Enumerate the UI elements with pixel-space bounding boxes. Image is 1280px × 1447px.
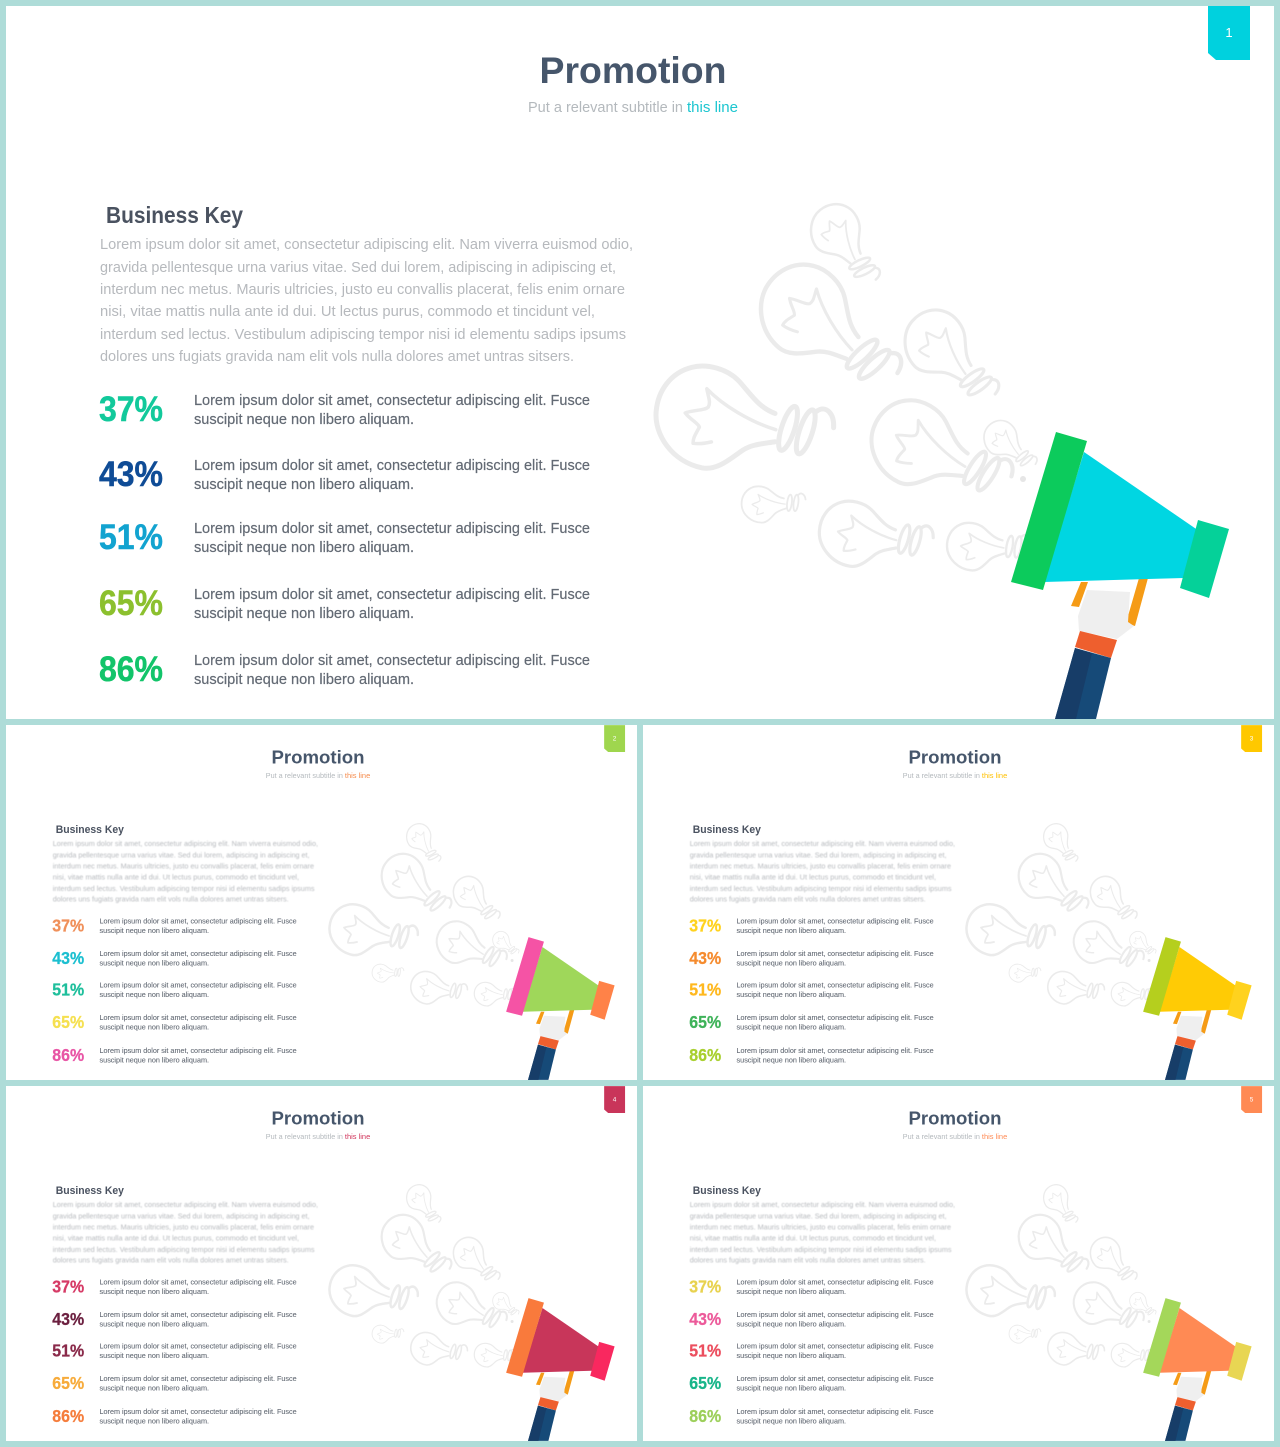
stat 43%: Lorem ipsum dolor sit amet, consectetur adipiscing elit. Fusce — [737, 1310, 934, 1319]
icon: light bulbs — [326, 1180, 523, 1369]
stat 37%: 37% — [689, 916, 722, 936]
stat 65%: suscipit neque non libero aliquam. — [737, 1384, 846, 1393]
stat 51%: 51% — [52, 979, 85, 999]
subtitle: Put a relevant subtitle in — [528, 99, 683, 116]
body paragraph: interdum nec metus. Mauris ultricies, justo eu convallis placerat, felis enim ornare — [53, 861, 314, 870]
stat 51%: Lorem ipsum dolor sit amet, consectetur adipiscing elit. Fusce — [100, 1341, 297, 1350]
stat 86%: 86% — [689, 1406, 722, 1426]
body paragraph: Lorem ipsum dolor sit amet, consectetur adipiscing elit. Nam viverra euismod odio, — [53, 1200, 318, 1209]
title: Promotion — [908, 746, 1002, 767]
body paragraph: dolores uns fugiats gravida nam elit vols nulla dolores amet untras sitsers. — [53, 1256, 289, 1265]
stat 65%: 65% — [689, 1373, 722, 1393]
body paragraph: dolores uns fugiats gravida nam elit vols nulla dolores amet untras sitsers. — [690, 895, 926, 904]
stat 37%: Lorem ipsum dolor sit amet, consectetur adipiscing elit. Fusce — [737, 1278, 934, 1287]
body paragraph: interdum nec metus. Mauris ultricies, justo eu convallis placerat, felis enim ornare — [100, 281, 625, 298]
stat 86%: 86% — [99, 650, 163, 689]
body paragraph: Lorem ipsum dolor sit amet, consectetur adipiscing elit. Nam viverra euismod odio, — [690, 839, 955, 848]
title: Promotion — [908, 1107, 1002, 1128]
stat 51%: 51% — [52, 1340, 85, 1360]
stat 43%: 43% — [99, 455, 163, 494]
body paragraph: interdum nec metus. Mauris ultricies, justo eu convallis placerat, felis enim ornare — [690, 861, 951, 870]
stat 37%: Lorem ipsum dolor sit amet, consectetur adipiscing elit. Fusce — [100, 1278, 297, 1287]
stat 43% — [52, 1309, 297, 1329]
subtitle: this line — [345, 771, 370, 780]
stat 51%: suscipit neque non libero aliquam. — [100, 990, 209, 999]
stat 65% — [689, 1373, 934, 1393]
body paragraph: nisi, vitae mattis nulla ante id dui. Ut lectus purus, commodo et tincidunt vel, — [53, 872, 299, 881]
stat 65% — [52, 1373, 297, 1393]
stat 65%: 65% — [52, 1012, 85, 1032]
stat 43%: 43% — [52, 948, 85, 968]
icon: light bulbs — [963, 1180, 1160, 1369]
body paragraph: dolores uns fugiats gravida nam elit vols nulla dolores amet untras sitsers. — [690, 1256, 926, 1265]
stat 86%: suscipit neque non libero aliquam. — [194, 671, 414, 688]
heading: Business Key: Business Key — [56, 1185, 125, 1197]
body paragraph: Lorem ipsum dolor sit amet, consectetur adipiscing elit. Nam viverra euismod odio, — [100, 236, 633, 253]
body paragraph: Lorem ipsum dolor sit amet, consectetur adipiscing elit. Nam viverra euismod odio, — [690, 1200, 955, 1209]
stat 51%: Lorem ipsum dolor sit amet, consectetur adipiscing elit. Fusce — [737, 1341, 934, 1350]
stat 51%: 51% — [689, 1340, 722, 1360]
stat 37%: suscipit neque non libero aliquam. — [737, 926, 846, 935]
stat 51%: 51% — [99, 518, 163, 557]
stat 43%: Lorem ipsum dolor sit amet, consectetur adipiscing elit. Fusce — [737, 949, 934, 958]
stat 86%: 86% — [52, 1045, 85, 1065]
stat 37%: 37% — [99, 390, 163, 429]
stat 86%: Lorem ipsum dolor sit amet, consectetur adipiscing elit. Fusce — [737, 1407, 934, 1416]
subtitle: this line — [687, 99, 738, 116]
body paragraph: interdum sed lectus. Vestibulum adipiscing tempor nisi id elementu sadips ipsums — [100, 326, 626, 343]
stat 51%: suscipit neque non libero aliquam. — [100, 1351, 209, 1360]
stat 51% — [99, 518, 590, 557]
stat 51%: Lorem ipsum dolor sit amet, consectetur adipiscing elit. Fusce — [100, 980, 297, 989]
panel: slide 5 — [643, 1086, 1274, 1441]
body paragraph: interdum nec metus. Mauris ultricies, justo eu convallis placerat, felis enim ornare — [690, 1222, 951, 1231]
stat 43%: suscipit neque non libero aliquam. — [100, 1319, 209, 1328]
stat 43%: 43% — [689, 1309, 722, 1329]
stat 37%: suscipit neque non libero aliquam. — [100, 926, 209, 935]
stat 65% — [99, 584, 590, 623]
stat 43%: Lorem ipsum dolor sit amet, consectetur adipiscing elit. Fusce — [194, 457, 590, 474]
stat 65% — [689, 1012, 934, 1032]
stat 51%: Lorem ipsum dolor sit amet, consectetur adipiscing elit. Fusce — [737, 980, 934, 989]
heading: Business Key: Business Key — [693, 1185, 762, 1197]
stat 65%: Lorem ipsum dolor sit amet, consectetur adipiscing elit. Fusce — [100, 1013, 297, 1022]
stat 37% — [689, 1277, 934, 1297]
body paragraph: dolores uns fugiats gravida nam elit vols nulla dolores amet untras sitsers. — [53, 895, 289, 904]
stat 43% — [689, 948, 934, 968]
stat 65%: suscipit neque non libero aliquam. — [100, 1384, 209, 1393]
stat 37%: 37% — [689, 1277, 722, 1297]
page tag 5: 5 — [1250, 1097, 1254, 1104]
page tag 5 — [1241, 1086, 1262, 1113]
stat 43%: suscipit neque non libero aliquam. — [737, 1319, 846, 1328]
body paragraph: interdum sed lectus. Vestibulum adipiscing tempor nisi id elementu sadips ipsums — [53, 884, 315, 893]
stat 37%: suscipit neque non libero aliquam. — [194, 411, 414, 428]
stat 43%: 43% — [689, 948, 722, 968]
stat 86%: 86% — [689, 1045, 722, 1065]
stat 37%: Lorem ipsum dolor sit amet, consectetur adipiscing elit. Fusce — [100, 917, 297, 926]
body paragraph: interdum sed lectus. Vestibulum adipiscing tempor nisi id elementu sadips ipsums — [53, 1245, 315, 1254]
stat 65%: 65% — [689, 1012, 722, 1032]
title: Promotion — [271, 1107, 365, 1128]
panel: slide 2 — [6, 725, 637, 1080]
stat 51%: suscipit neque non libero aliquam. — [737, 1351, 846, 1360]
page tag 1 — [1208, 6, 1250, 60]
stat 37% — [99, 390, 590, 429]
heading: Business Key: Business Key — [106, 202, 243, 228]
heading: Business Key: Business Key — [56, 824, 125, 836]
stat 51%: Lorem ipsum dolor sit amet, consectetur adipiscing elit. Fusce — [194, 520, 590, 537]
stat 86%: Lorem ipsum dolor sit amet, consectetur adipiscing elit. Fusce — [100, 1407, 297, 1416]
subtitle: Put a relevant subtitle in — [266, 771, 343, 780]
stat 86%: Lorem ipsum dolor sit amet, consectetur adipiscing elit. Fusce — [100, 1046, 297, 1055]
body paragraph — [690, 1200, 955, 1265]
stat 86% — [689, 1406, 934, 1426]
body paragraph: interdum sed lectus. Vestibulum adipiscing tempor nisi id elementu sadips ipsums — [690, 1245, 952, 1254]
stat 43%: Lorem ipsum dolor sit amet, consectetur adipiscing elit. Fusce — [100, 1310, 297, 1319]
panel: slide 3 — [643, 725, 1274, 1080]
stat 37%: 37% — [52, 1277, 85, 1297]
body paragraph: nisi, vitae mattis nulla ante id dui. Ut lectus purus, commodo et tincidunt vel, — [53, 1233, 299, 1242]
stat 86%: suscipit neque non libero aliquam. — [737, 1416, 846, 1425]
subtitle: this line — [982, 771, 1007, 780]
body paragraph: dolores uns fugiats gravida nam elit vols nulla dolores amet untras sitsers. — [100, 348, 574, 365]
heading: Business Key: Business Key — [693, 824, 762, 836]
stat 43% — [99, 455, 590, 494]
icon: light bulbs — [963, 819, 1160, 1008]
stat 51%: suscipit neque non libero aliquam. — [737, 990, 846, 999]
stat 65%: Lorem ipsum dolor sit amet, consectetur adipiscing elit. Fusce — [737, 1013, 934, 1022]
stat 86% — [52, 1045, 297, 1065]
subtitle: this line — [982, 1132, 1007, 1141]
icon: light bulbs — [649, 195, 1045, 575]
stat 65%: suscipit neque non libero aliquam. — [737, 1023, 846, 1032]
stat 65%: 65% — [52, 1373, 85, 1393]
stat 37%: Lorem ipsum dolor sit amet, consectetur adipiscing elit. Fusce — [194, 392, 590, 409]
stat 37%: 37% — [52, 916, 85, 936]
stat 43%: suscipit neque non libero aliquam. — [100, 958, 209, 967]
body paragraph: gravida pellentesque urna varius vitae. Sed dui lorem, adipiscing in adipiscing et, — [53, 1211, 310, 1220]
body paragraph — [53, 839, 318, 904]
subtitle: Put a relevant subtitle in — [266, 1132, 343, 1141]
icon: megaphone held by hand — [1143, 937, 1252, 1080]
stat 86% — [52, 1406, 297, 1426]
stat 86%: 86% — [52, 1406, 85, 1426]
body paragraph — [690, 839, 955, 904]
stat 86% — [689, 1045, 934, 1065]
body paragraph: gravida pellentesque urna varius vitae. Sed dui lorem, adipiscing in adipiscing et, — [100, 259, 616, 276]
stat 43%: suscipit neque non libero aliquam. — [194, 476, 414, 493]
title: Promotion — [271, 746, 365, 767]
subtitle: Put a relevant subtitle in — [903, 771, 980, 780]
stat 65%: Lorem ipsum dolor sit amet, consectetur adipiscing elit. Fusce — [100, 1374, 297, 1383]
stat 51%: suscipit neque non libero aliquam. — [194, 539, 414, 556]
stat 86%: Lorem ipsum dolor sit amet, consectetur adipiscing elit. Fusce — [737, 1046, 934, 1055]
icon: light bulbs — [326, 819, 523, 1008]
body paragraph: gravida pellentesque urna varius vitae. Sed dui lorem, adipiscing in adipiscing et, — [690, 1211, 947, 1220]
icon: megaphone held by hand — [506, 1298, 615, 1441]
page tag 4: 4 — [613, 1097, 617, 1104]
stat 65%: suscipit neque non libero aliquam. — [100, 1023, 209, 1032]
body paragraph: nisi, vitae mattis nulla ante id dui. Ut lectus purus, commodo et tincidunt vel, — [690, 1233, 936, 1242]
stat 86% — [99, 650, 590, 689]
stat 65% — [52, 1012, 297, 1032]
body paragraph: Lorem ipsum dolor sit amet, consectetur adipiscing elit. Nam viverra euismod odio, — [53, 839, 318, 848]
stat 86%: suscipit neque non libero aliquam. — [100, 1055, 209, 1064]
stat 86%: suscipit neque non libero aliquam. — [100, 1416, 209, 1425]
body paragraph — [53, 1200, 318, 1265]
panel: slide 4 — [6, 1086, 637, 1441]
icon: megaphone held by hand — [1011, 432, 1229, 719]
icon: megaphone held by hand — [1143, 1298, 1252, 1441]
stat 51% — [52, 979, 297, 999]
page tag 1: 1 — [1225, 25, 1233, 40]
stat 51%: 51% — [689, 979, 722, 999]
subtitle: this line — [345, 1132, 370, 1141]
stat 43%: Lorem ipsum dolor sit amet, consectetur adipiscing elit. Fusce — [100, 949, 297, 958]
icon: megaphone held by hand — [506, 937, 615, 1080]
stat 43%: 43% — [52, 1309, 85, 1329]
stat 51% — [52, 1340, 297, 1360]
panel: main slide 1 — [6, 6, 1274, 719]
title: Promotion — [540, 49, 726, 91]
stat 86%: suscipit neque non libero aliquam. — [737, 1055, 846, 1064]
body paragraph — [100, 236, 633, 365]
stat 37%: suscipit neque non libero aliquam. — [737, 1287, 846, 1296]
body paragraph: gravida pellentesque urna varius vitae. Sed dui lorem, adipiscing in adipiscing et, — [53, 850, 310, 859]
body paragraph: interdum nec metus. Mauris ultricies, justo eu convallis placerat, felis enim ornare — [53, 1222, 314, 1231]
body paragraph: nisi, vitae mattis nulla ante id dui. Ut lectus purus, commodo et tincidunt vel, — [690, 872, 936, 881]
stat 86%: Lorem ipsum dolor sit amet, consectetur adipiscing elit. Fusce — [194, 652, 590, 669]
stat 65%: 65% — [99, 584, 163, 623]
stat 37%: Lorem ipsum dolor sit amet, consectetur adipiscing elit. Fusce — [737, 917, 934, 926]
body paragraph: nisi, vitae mattis nulla ante id dui. Ut lectus purus, commodo et tincidunt vel, — [100, 303, 595, 320]
body paragraph: gravida pellentesque urna varius vitae. Sed dui lorem, adipiscing in adipiscing et, — [690, 850, 947, 859]
page tag 2 — [604, 725, 625, 752]
page tag 4 — [604, 1086, 625, 1113]
stat 43%: suscipit neque non libero aliquam. — [737, 958, 846, 967]
stat 43% — [52, 948, 297, 968]
stat 37% — [52, 916, 297, 936]
stat 43% — [689, 1309, 934, 1329]
stat 65%: suscipit neque non libero aliquam. — [194, 605, 414, 622]
stat 51% — [689, 979, 934, 999]
page tag 3 — [1241, 725, 1262, 752]
subtitle: Put a relevant subtitle in — [903, 1132, 980, 1141]
stat 65%: Lorem ipsum dolor sit amet, consectetur adipiscing elit. Fusce — [737, 1374, 934, 1383]
stat 51% — [689, 1340, 934, 1360]
page tag 3: 3 — [1250, 736, 1254, 743]
stat 37% — [52, 1277, 297, 1297]
body paragraph: interdum sed lectus. Vestibulum adipiscing tempor nisi id elementu sadips ipsums — [690, 884, 952, 893]
page tag 2: 2 — [613, 736, 617, 743]
stat 37% — [689, 916, 934, 936]
stat 65%: Lorem ipsum dolor sit amet, consectetur adipiscing elit. Fusce — [194, 586, 590, 603]
stat 37%: suscipit neque non libero aliquam. — [100, 1287, 209, 1296]
